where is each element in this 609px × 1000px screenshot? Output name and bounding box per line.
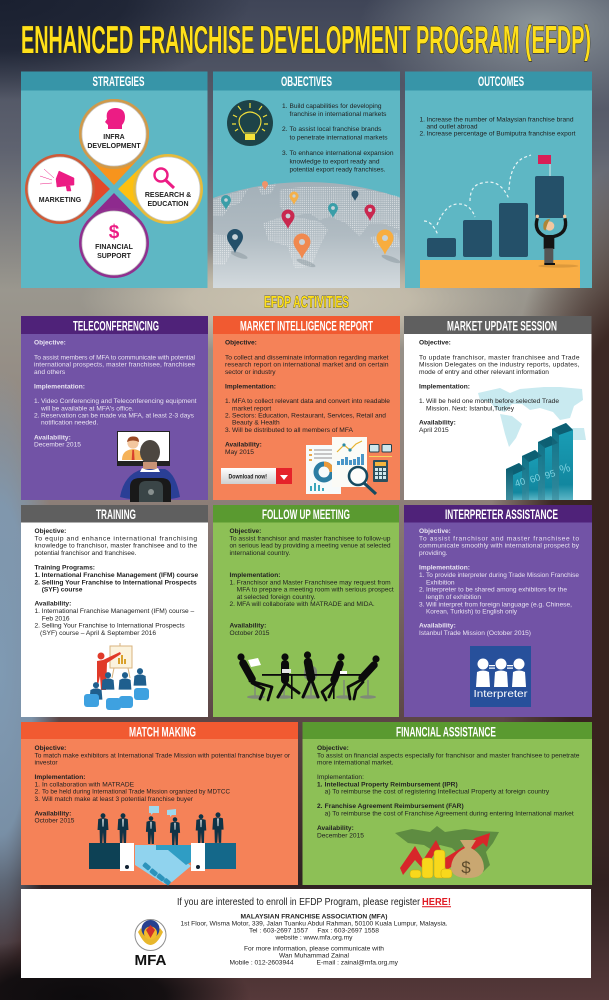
market intelligence text: market report bbox=[232, 405, 271, 412]
outcomes list: Increase percentage of Bumiputra franchise export bbox=[426, 130, 576, 138]
follow up text: on serious lead by providing a meeting venue at selected bbox=[230, 543, 391, 550]
icon: interpreter sign: Interpreter bbox=[474, 688, 528, 700]
panel: training bbox=[21, 505, 208, 717]
teleconferencing text bbox=[34, 340, 197, 449]
panel: footer contact bbox=[21, 889, 591, 978]
market update text: April 2015 bbox=[419, 427, 449, 434]
outcomes list: 1. bbox=[420, 116, 425, 123]
icon: megaphone bbox=[40, 169, 74, 191]
financial assistance text: Implementation: bbox=[317, 774, 364, 781]
teleconferencing text: and others bbox=[34, 369, 66, 376]
market intelligence text: MFA to collect relevant data and convert into readable bbox=[232, 398, 390, 405]
objectives list: franchise in international markets bbox=[290, 111, 387, 118]
financial assistance text: 1. bbox=[317, 781, 323, 788]
icon: magnifier bbox=[154, 168, 174, 188]
financial assistance text: Objective: bbox=[317, 745, 349, 752]
association contact details: Mobile : 012-2603944 bbox=[230, 959, 294, 966]
heading: financial assistance: FINANCIAL ASSISTANCE bbox=[396, 724, 496, 740]
association contact details: website : www.mfa.org.my bbox=[274, 934, 353, 941]
match making text: Implementation: bbox=[34, 774, 85, 781]
interpreter text: 3. bbox=[419, 601, 425, 608]
icon: handshake and business people bbox=[89, 806, 236, 886]
match making text: Availability: bbox=[34, 811, 71, 818]
training text: potential franchisor and franchisee. bbox=[34, 550, 137, 557]
interpreter text: communicate smoothly with international prospect by bbox=[419, 543, 580, 550]
heading: teleconferencing: TELECONFERENCING bbox=[73, 318, 159, 334]
teardrop: financial support bbox=[79, 193, 149, 278]
financial assistance text: 2. bbox=[317, 803, 323, 810]
follow up text: 1. bbox=[230, 579, 235, 586]
interpreter text: To provide interpreter during Trade Mission Franchise bbox=[426, 572, 579, 579]
icon: head with gears bbox=[105, 108, 125, 129]
association contact details: 1st Floor, Wisma Motor, 339, Jalan Tuanku Abdul Rahman, 50100 Kuala Lumpur, Malaysia. bbox=[180, 921, 448, 928]
objectives list: To assist local franchise brands bbox=[290, 126, 382, 133]
icon: light bulb bbox=[227, 100, 273, 146]
match making text: Will match make at least 3 potential franchise buyer bbox=[42, 796, 194, 803]
map pins bbox=[221, 181, 401, 269]
teleconferencing text: international prospects, master franchisee, franchisee bbox=[34, 362, 195, 369]
objectives list: knowledge to export ready and bbox=[290, 158, 380, 165]
financial assistance text: a) To reimburse the cost of Franchise Agreement during entering International market bbox=[325, 810, 574, 817]
icon: world map, coins, money bag: $ bbox=[461, 858, 471, 877]
teardrop: marketing bbox=[25, 154, 110, 224]
icon: meeting silhouettes bbox=[237, 651, 380, 700]
association contact details: MALAYSIAN FRANCHISE ASSOCIATION (MFA) bbox=[240, 914, 388, 920]
panel: match making bbox=[21, 722, 298, 886]
teleconferencing text: Implementation: bbox=[34, 384, 85, 391]
heading: follow up meeting: FOLLOW UP MEETING bbox=[262, 506, 350, 522]
dotted world globe bbox=[213, 181, 400, 288]
match making text: 3. bbox=[34, 796, 40, 803]
interpreter text: Will interpret from foreign language (e.g. Chinese, bbox=[426, 601, 572, 608]
training text: Objective: bbox=[34, 528, 66, 535]
outcomes list: and outlet abroad bbox=[426, 124, 478, 130]
market intelligence text: Implementation: bbox=[225, 384, 276, 391]
heading: objectives: OBJECTIVES bbox=[281, 73, 332, 89]
market update text: Availability: bbox=[419, 420, 456, 427]
financial assistance text: more international market. bbox=[317, 760, 394, 767]
follow up text: Objective: bbox=[230, 528, 261, 535]
training text: Selling Your Franchise to International Prospects bbox=[42, 579, 197, 586]
interpreter text: Exhibition bbox=[426, 579, 455, 586]
follow up text bbox=[230, 528, 394, 637]
icon: world map, coins, money bag bbox=[395, 826, 499, 878]
interpreter text: Interpreter to be shared among exhibitors for the bbox=[426, 587, 567, 594]
teardrop: financial support: FINANCIAL bbox=[95, 244, 134, 251]
panel: objectives bbox=[213, 72, 400, 288]
icon: video conference bbox=[117, 431, 180, 502]
training text: International Franchise Management (IFM) course bbox=[42, 572, 199, 579]
financial assistance text: To assist on financial aspects especially for franchisor and master franchisee to penetrate bbox=[317, 752, 580, 759]
market intelligence text: sector or industry bbox=[225, 369, 276, 376]
heading: match making: MATCH MAKING bbox=[129, 724, 196, 740]
chart: 3d percentage bars: 60 bbox=[529, 472, 542, 486]
interpreter text: 1. bbox=[419, 572, 425, 579]
match making text bbox=[34, 745, 291, 825]
objectives list: potential export ready franchises. bbox=[290, 166, 386, 173]
objectives list: 3. bbox=[282, 150, 288, 157]
teleconferencing text: 1. bbox=[34, 398, 40, 405]
chart: rising bars with man and flag bbox=[420, 155, 580, 288]
training text: 1. bbox=[34, 608, 40, 615]
association contact details: E-mail : zainal@mfa.org.my bbox=[316, 959, 399, 966]
interpreter text: Istanbul Trade Mission (October 2015) bbox=[419, 630, 531, 637]
market update text: Objective: bbox=[419, 340, 451, 347]
register call to action: HERE! bbox=[422, 896, 451, 908]
outcomes list: Increase the number of Malaysian franchise brand bbox=[426, 116, 574, 123]
objectives list: to penetrate international markets bbox=[290, 134, 388, 141]
match making text: To be held during International Trade Mission organized by MDTCC bbox=[42, 789, 230, 796]
teardrop: research and education bbox=[118, 154, 203, 224]
market update text: 1. bbox=[419, 398, 425, 405]
download button: Download now! bbox=[228, 475, 267, 481]
market intelligence text: 1. bbox=[225, 398, 231, 405]
teardrop: infra development: INFRA bbox=[103, 134, 125, 141]
market update text: Implementation: bbox=[419, 384, 470, 391]
association contact details: Wan Muhammad Zainal bbox=[279, 953, 349, 960]
interpreter text: Korean, Turkish) to English only bbox=[426, 609, 518, 616]
market update text: mode of entry and other relevant information bbox=[419, 369, 549, 376]
teleconferencing text: notification needed. bbox=[41, 420, 98, 427]
teleconferencing text: Reservation can be made via MFA, at least 2-3 days bbox=[41, 413, 195, 420]
market intelligence text: 3. bbox=[225, 427, 231, 434]
teleconferencing text: Availability: bbox=[34, 434, 71, 441]
chart: 3d percentage bars bbox=[506, 423, 573, 500]
teleconferencing text: 2. bbox=[34, 413, 40, 420]
market intelligence text: Objective: bbox=[225, 340, 257, 347]
financial assistance text: Availability: bbox=[317, 825, 354, 832]
market intelligence text: 2. bbox=[225, 413, 231, 420]
follow up text: MFA to prepare a meeting room with serious prospect bbox=[237, 587, 394, 594]
icon: presenter and audience bbox=[84, 643, 149, 710]
market intelligence text: May 2015 bbox=[225, 449, 254, 456]
teardrop: research and education: RESEARCH & bbox=[145, 192, 191, 199]
interpreter text: length of exhibition bbox=[426, 594, 481, 601]
training text: Feb 2016 bbox=[42, 615, 70, 622]
training text: International Franchise Management (IFM) course – bbox=[42, 608, 195, 615]
follow up text: Franchisor and Master Franchisee may request from bbox=[237, 579, 391, 586]
teleconferencing text: Video Conferencing and Teleconferencing equipment bbox=[41, 398, 197, 405]
follow up text: To assist franchisor and master franchisee to follow-up bbox=[230, 535, 391, 542]
training text: Selling Your Franchise to International Prospects bbox=[42, 623, 185, 630]
outcomes list bbox=[420, 116, 576, 138]
objectives list: Build capabilities for developing bbox=[290, 103, 382, 110]
objectives list: 2. bbox=[282, 126, 288, 133]
panel: outcomes bbox=[405, 72, 592, 288]
panel: market intelligence report bbox=[213, 316, 400, 500]
market update text: Mission Delegates on the industry reports, updates, bbox=[419, 362, 580, 369]
market intelligence text: Will be distributed to all members of MFA bbox=[232, 427, 354, 434]
panel: follow up meeting bbox=[213, 505, 399, 717]
training text: 2. bbox=[34, 579, 40, 586]
market intelligence text: Beauty & Health bbox=[232, 420, 280, 427]
teardrop: research and education: EDUCATION bbox=[147, 201, 189, 208]
teardrop: financial support: SUPPORT bbox=[97, 253, 132, 260]
teleconferencing text: will be available at MFA's office. bbox=[40, 405, 134, 412]
panel: financial assistance bbox=[302, 722, 592, 885]
objectives list: To enhance international expansion bbox=[290, 150, 394, 157]
register call to action: If you are interested to enroll in EFDP Program, please register bbox=[177, 897, 421, 908]
teardrop: infra development: DEVELOPMENT bbox=[87, 143, 141, 150]
heading: strategies: STRATEGIES bbox=[92, 73, 144, 89]
match making text: 1. bbox=[34, 781, 40, 788]
match making text: October 2015 bbox=[34, 818, 75, 825]
market update text bbox=[419, 340, 580, 434]
market update text: Will be held one month before selected Trade bbox=[426, 398, 559, 405]
market intelligence text: To collect and disseminate information regarding market bbox=[225, 354, 389, 361]
dashed jump arrows bbox=[424, 155, 531, 235]
match making text: 2. bbox=[34, 789, 40, 796]
training text: (SYF) course bbox=[42, 587, 83, 594]
association contact details: Tel : 603-2697 1557 Fax : 603-2697 1558 bbox=[249, 927, 379, 934]
follow up text: Availability: bbox=[230, 623, 266, 630]
market intelligence text: research report on international market and on certain bbox=[225, 362, 389, 369]
teleconferencing text: To assist members of MFA to communicate with potential bbox=[34, 354, 196, 361]
match making text: investor bbox=[34, 760, 58, 767]
icon: report charts and magnifier bbox=[306, 437, 392, 494]
interpreter text: 2. bbox=[419, 587, 425, 594]
market update text: Mission. Next: Istanbul,Turkey bbox=[426, 405, 515, 412]
financial assistance text: Intellectual Property Reimbursement (IPR) bbox=[325, 781, 458, 788]
training text: (SYF) course – April & September 2016 bbox=[40, 630, 156, 637]
objectives list: 1. bbox=[282, 103, 288, 110]
panel: teleconferencing bbox=[21, 316, 208, 502]
follow up text: October 2015 bbox=[230, 630, 270, 637]
financial assistance text: a) To reimburse the cost of registering Intellectual Property at foreign country bbox=[325, 789, 550, 796]
heading: efdp activities: EFDP ACTIVITIES bbox=[264, 294, 349, 312]
objectives list bbox=[282, 103, 394, 173]
pale world map bbox=[478, 387, 586, 447]
training text: knowledge to franchisor, master franchisee and to the bbox=[34, 543, 197, 550]
interpreter text bbox=[419, 528, 580, 637]
training text bbox=[34, 528, 199, 637]
training text: 1. bbox=[34, 572, 40, 579]
association contact details: For more information, please communicate with bbox=[244, 946, 384, 953]
follow up text: MFA will collaborate with MATRADE and MIDA. bbox=[237, 601, 375, 608]
match making text: In collaboration with MATRADE bbox=[42, 781, 135, 788]
follow up text: Implementation: bbox=[230, 572, 280, 579]
teleconferencing text: Objective: bbox=[34, 340, 66, 347]
panel: market update session bbox=[404, 316, 592, 500]
panel: interpreter assistance bbox=[404, 505, 592, 717]
interpreter text: Implementation: bbox=[419, 565, 470, 572]
teardrop: marketing: MARKETING bbox=[39, 197, 82, 204]
outcomes list: 2. bbox=[420, 130, 425, 138]
market intelligence text bbox=[225, 340, 390, 456]
chart: 3d percentage bars: 95 bbox=[544, 468, 557, 482]
financial assistance text: Franchise Agreement Reimbursement (FAR) bbox=[325, 803, 464, 810]
chart: 3d percentage bars: 40 bbox=[514, 476, 527, 490]
market intelligence text: Availability: bbox=[225, 442, 262, 449]
interpreter text: To assist franchisor and master franchisee to bbox=[419, 535, 579, 542]
association contact details bbox=[180, 914, 448, 966]
interpreter text: providing. bbox=[419, 550, 448, 557]
heading: market intelligence report: MARKET INTELLIGENCE REPORT bbox=[240, 318, 373, 334]
training text: Training Programs: bbox=[34, 565, 95, 572]
financial assistance text: December 2015 bbox=[317, 832, 364, 839]
teardrop: infra development bbox=[79, 99, 149, 185]
interpreter text: Availability: bbox=[419, 623, 456, 630]
heading: training: TRAINING bbox=[96, 506, 136, 522]
download button bbox=[221, 468, 292, 484]
training text: 2. bbox=[34, 623, 40, 630]
financial assistance text bbox=[317, 745, 580, 839]
logo: mfa: MFA bbox=[134, 952, 167, 969]
chart: 3d percentage bars: % bbox=[558, 460, 572, 477]
logo: mfa bbox=[134, 920, 167, 969]
match making text: Objective: bbox=[34, 745, 66, 752]
heading: outcomes: OUTCOMES bbox=[478, 73, 524, 89]
interpreter text: Objective: bbox=[419, 528, 451, 535]
market update text: To update franchisor, master franchisee and Trade bbox=[419, 354, 580, 361]
icon: dollar: $ bbox=[109, 222, 120, 243]
training text: To equip and enhance international franchising bbox=[34, 535, 197, 542]
match making text: To match make exhibitors at International Trade Mission with potential franchise buyer or bbox=[34, 752, 291, 759]
follow up text: 2. bbox=[230, 601, 235, 608]
training text: Availability: bbox=[34, 601, 71, 608]
follow up text: international country. bbox=[230, 550, 290, 557]
panel: strategies bbox=[21, 72, 208, 288]
follow up text: at selected foreign country. bbox=[237, 594, 316, 601]
man holding bar bbox=[536, 215, 578, 268]
market intelligence text: Sectors: Education, Restaurant, Services, Retail and bbox=[232, 413, 386, 420]
teleconferencing text: December 2015 bbox=[34, 442, 81, 449]
icon: interpreter sign bbox=[470, 646, 531, 707]
